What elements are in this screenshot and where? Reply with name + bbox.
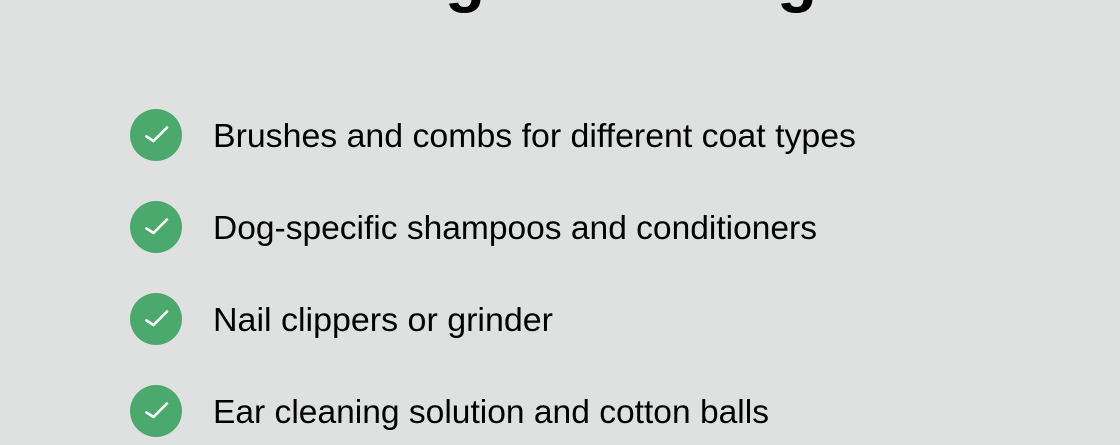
list item: shampoos and conditioners: Dog-specific shampoos and conditioners bbox=[213, 210, 817, 247]
title: cropped heading, only the descenders are visible bbox=[445, 0, 817, 13]
checklist bbox=[130, 109, 856, 437]
list item: ear cleaning bbox=[130, 385, 769, 437]
list item: shampoos and conditioners bbox=[130, 201, 817, 253]
list item: nail clippers bbox=[130, 293, 553, 345]
list item: ear cleaning: Ear cleaning solution and cotton balls bbox=[213, 394, 769, 431]
list item: nail clippers: Nail clippers or grinder bbox=[213, 302, 553, 339]
list item: brushes and combs: Brushes and combs for different coat types bbox=[213, 118, 856, 155]
list item: brushes and combs bbox=[130, 109, 856, 161]
